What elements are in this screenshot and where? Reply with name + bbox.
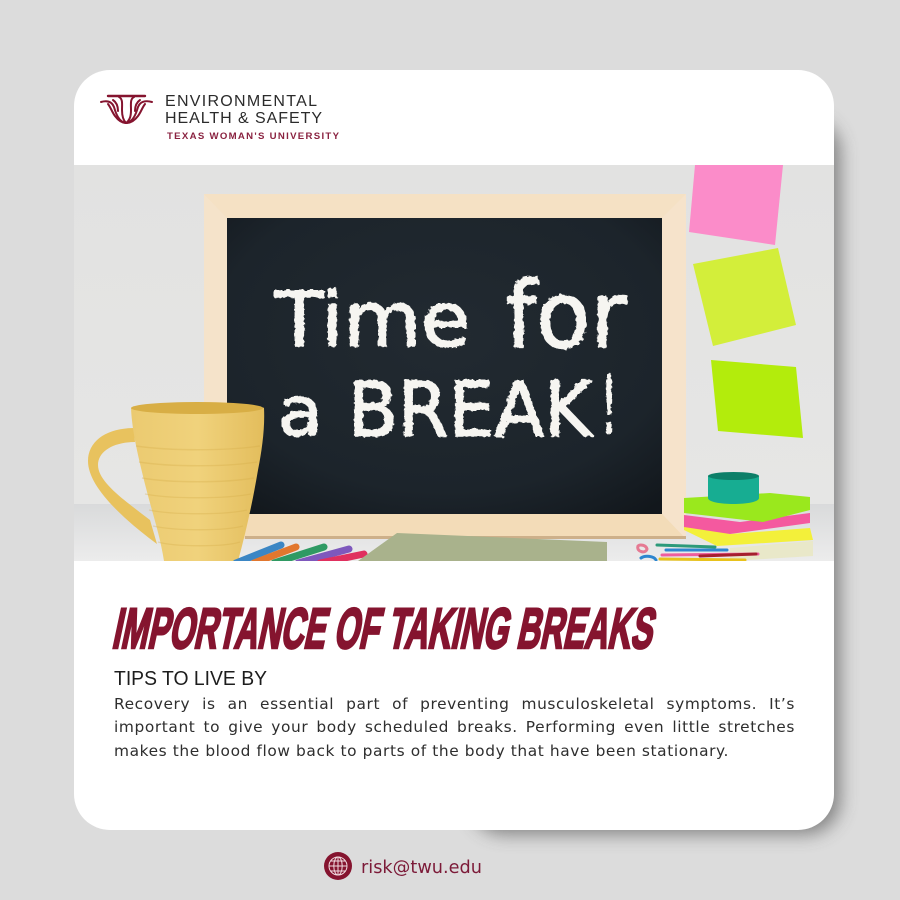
- lime sticky note top: [693, 248, 796, 346]
- green notebook: [358, 533, 607, 561]
- slate surface: [227, 218, 662, 514]
- subheading: TIPS TO LIVE BY: [114, 667, 267, 690]
- body text: Recovery is an essential part of preventing musculoskeletal symptoms. It’s: [114, 695, 795, 713]
- photo: chalkboard on a desk: [74, 165, 834, 563]
- chalk lettering: !: [600, 359, 618, 452]
- icon: university logo mark: [101, 96, 152, 123]
- body text: makes the blood flow back to parts of the body that have been stationary.: [114, 742, 729, 760]
- sticky pad stack: [684, 493, 813, 561]
- contact row: [324, 852, 482, 880]
- yellow mug: [88, 402, 264, 561]
- lime sticky note bottom: [711, 360, 803, 438]
- logo text: university name: TEXAS WOMAN'S UNIVERSITY: [167, 131, 340, 142]
- contact email: risk@twu.edu: [361, 857, 482, 878]
- chalkboard: [204, 194, 686, 539]
- chalk lettering: for: [505, 262, 627, 369]
- desk surface: [74, 504, 834, 561]
- green tape roll: [708, 472, 759, 504]
- chalk lettering: BREAK: [348, 365, 594, 454]
- icon: globe: [324, 852, 352, 880]
- chalk lettering: [273, 275, 628, 438]
- wooden frame: [244, 538, 245, 539]
- wall: [74, 165, 834, 505]
- colored markers: [236, 545, 364, 563]
- paper clips: [638, 545, 758, 560]
- infographic canvas: [74, 70, 852, 880]
- logo text: department name line 2: HEALTH & SAFETY: [165, 110, 322, 127]
- logo header: [101, 93, 340, 142]
- card drop shadow: [470, 118, 840, 834]
- logo text: department name line 1: ENVIRONMENTAL: [165, 93, 317, 110]
- body text: [114, 695, 795, 760]
- chalk lettering: Time: [274, 275, 470, 364]
- pink sticky note: [689, 165, 783, 245]
- chalk lettering: a: [278, 373, 323, 452]
- body text: important to give your body scheduled breaks. Performing even little stretches: [114, 718, 795, 736]
- white card panel: [74, 70, 834, 830]
